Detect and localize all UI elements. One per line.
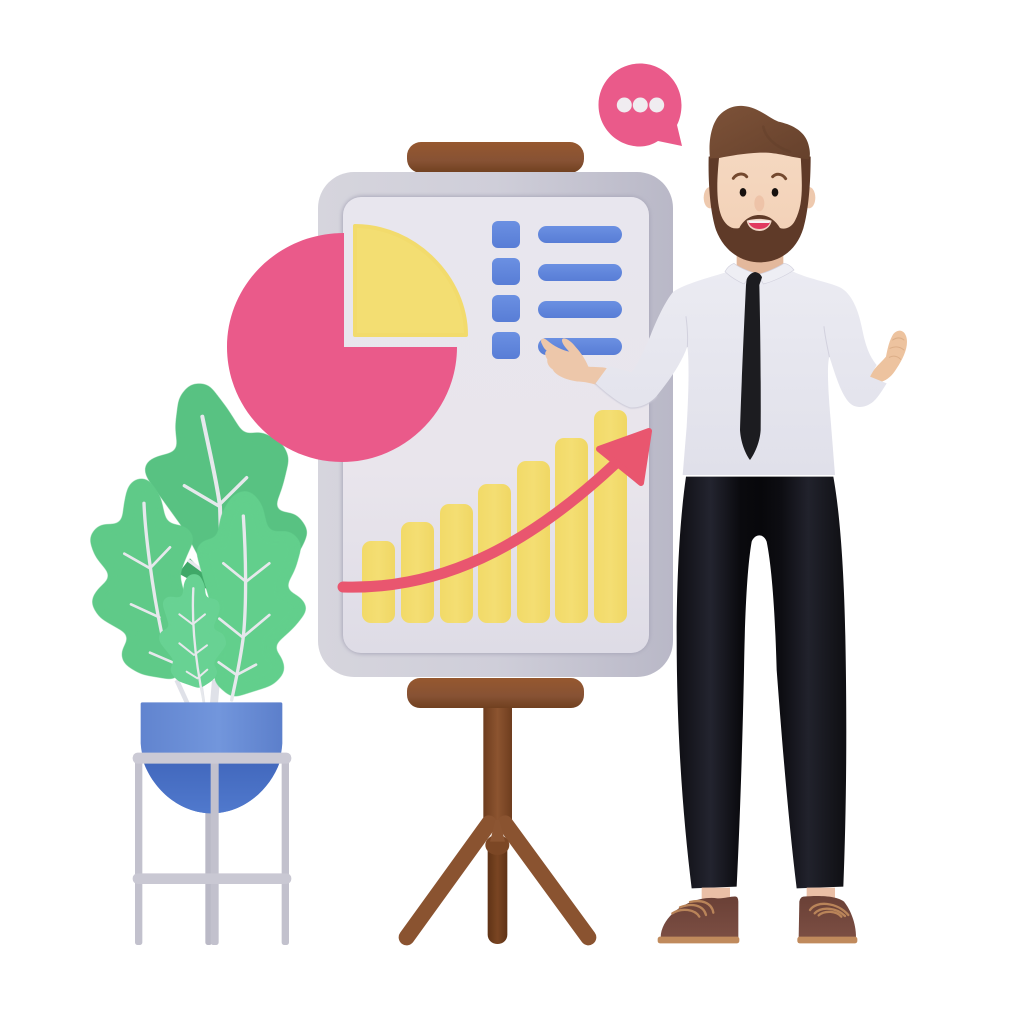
pie yellow slice bbox=[355, 226, 466, 335]
trousers bbox=[677, 477, 846, 888]
ankles and shoes bbox=[658, 888, 857, 943]
presentation board bbox=[318, 172, 673, 677]
hair shading bbox=[763, 127, 790, 152]
stand frame bbox=[133, 753, 291, 945]
hand: presenting hand bbox=[541, 338, 607, 385]
easel top bar bbox=[407, 142, 584, 173]
veins: left and right leaves bbox=[124, 503, 269, 700]
growth arrow bbox=[343, 431, 649, 587]
leaf: left bbox=[95, 484, 190, 674]
beard bbox=[709, 155, 811, 262]
tie bbox=[740, 272, 762, 460]
leaf: right bbox=[202, 497, 302, 692]
shirt with arms bbox=[541, 255, 907, 475]
hand: open right hand bbox=[870, 331, 907, 383]
leaf: top back bbox=[151, 390, 302, 583]
pot lower shade bbox=[143, 762, 280, 813]
neck bbox=[737, 255, 783, 278]
mouth bbox=[747, 219, 772, 231]
eyes bbox=[740, 188, 746, 197]
easel legs and mast bbox=[407, 703, 588, 944]
nose bbox=[754, 195, 764, 211]
leaf stems bbox=[177, 680, 216, 703]
leaf: small front bbox=[163, 578, 222, 684]
face bbox=[713, 152, 806, 250]
plant bbox=[95, 390, 302, 703]
finger creases bbox=[889, 338, 904, 359]
presenter bbox=[541, 106, 907, 943]
pot bbox=[141, 702, 282, 813]
pie main slice bbox=[227, 233, 457, 462]
head bbox=[704, 106, 815, 262]
veins: small leaf bbox=[179, 588, 207, 703]
easel lower bar bbox=[407, 678, 584, 708]
vein: top leaf bbox=[184, 417, 247, 573]
leaf shadow gap bbox=[178, 558, 217, 593]
legend rows bbox=[492, 221, 622, 359]
sleeve shadow bbox=[596, 383, 657, 407]
eyebrows bbox=[733, 174, 786, 179]
plant stand and pot bbox=[133, 702, 291, 945]
rear leg bbox=[205, 810, 212, 945]
bar chart bbox=[362, 410, 627, 623]
shirt body and sleeves bbox=[596, 272, 887, 475]
sleeve creases bbox=[686, 317, 829, 357]
hair bbox=[709, 106, 810, 159]
pie chart bbox=[227, 226, 466, 462]
ears bbox=[704, 187, 716, 208]
speech bubble bbox=[598, 64, 682, 146]
collar bbox=[725, 263, 794, 284]
